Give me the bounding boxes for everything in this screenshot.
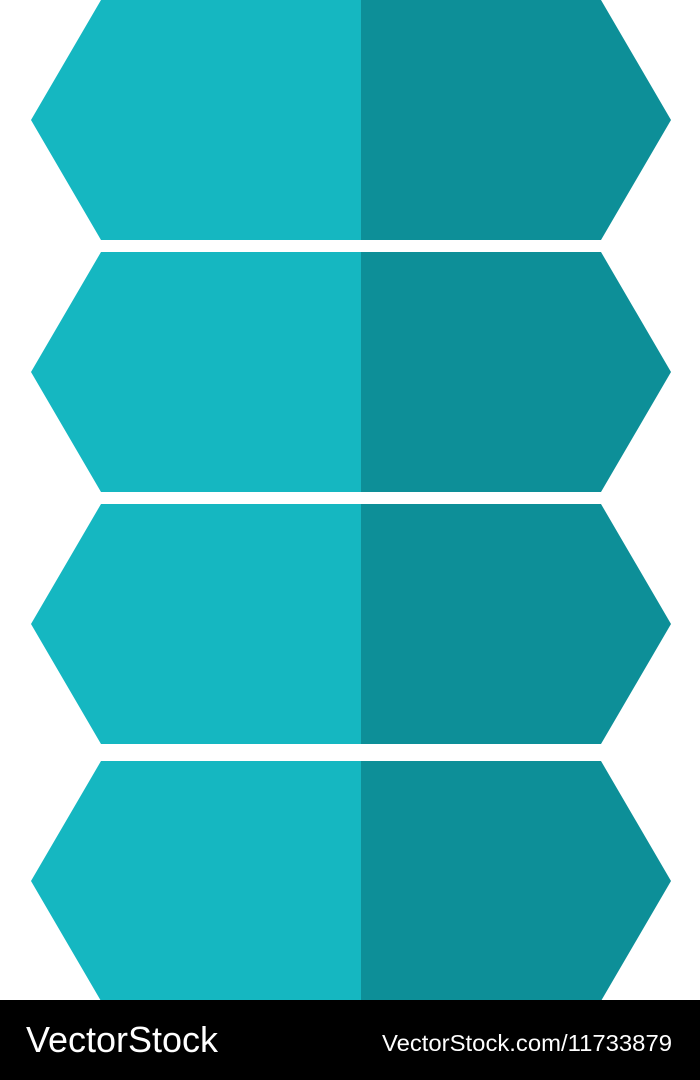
- watermark brand name: VectorStock: [26, 1019, 219, 1060]
- hexagon panel 2: [31, 252, 671, 492]
- hexagon panel 3: [31, 504, 671, 744]
- watermark url: VectorStock.com/11733879: [382, 1030, 672, 1056]
- hexagon panel 1: [31, 0, 671, 240]
- watermark footer bar: [0, 1000, 700, 1080]
- hexagon panel 4: [31, 761, 671, 1001]
